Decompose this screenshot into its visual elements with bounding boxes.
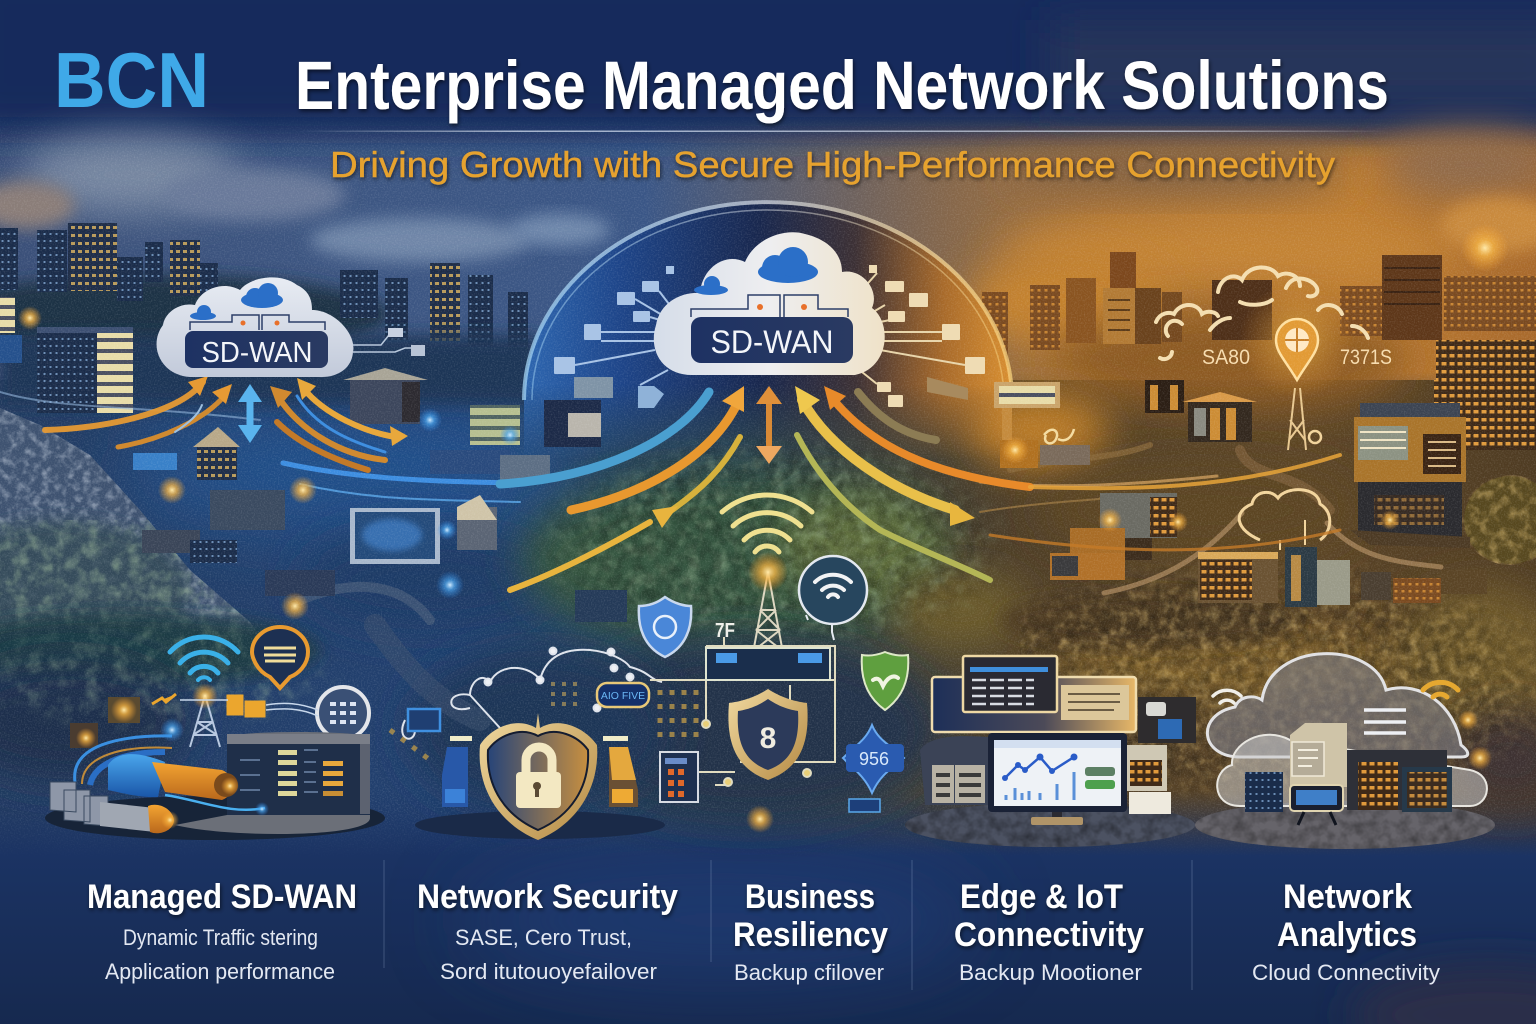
text block: Managed SD-WAN: Managed SD-WAN	[87, 878, 357, 916]
icon: green shield	[862, 652, 908, 710]
left skyline	[0, 223, 540, 413]
panel: edge and IoT illustration	[900, 656, 1200, 850]
text block: Edge and IoT Connectivity	[954, 878, 1144, 985]
status tag: AIO FIVE	[601, 690, 645, 702]
right cloud icons and location pin	[1156, 267, 1392, 450]
status readouts	[715, 620, 822, 663]
text block: Business Resiliency: Backup cfilover	[734, 960, 884, 985]
icon: wifi circle	[799, 556, 867, 640]
panel: managed SD-WAN illustration	[45, 627, 385, 840]
text block: Network Analytics: Analytics	[1277, 916, 1417, 954]
arrows to central cloud	[500, 386, 1340, 590]
icon: gold resiliency shield	[728, 689, 808, 780]
monitor with analytics chart	[988, 733, 1127, 825]
small buildings right	[994, 380, 1487, 607]
circuit lines and status box	[650, 637, 835, 786]
small buildings left	[133, 368, 627, 622]
icon: grid circle	[317, 687, 369, 739]
right skyline	[982, 224, 1536, 450]
status readouts: 7F	[715, 620, 735, 642]
right road curves	[980, 445, 1441, 593]
text block: Network Analytics: Cloud Connectivity	[1252, 960, 1440, 985]
text block: Network Security: SASE, Cero Trust,	[455, 925, 632, 950]
left SD-WAN cloud: SD-WAN	[202, 337, 312, 369]
text block: Edge and IoT Connectivity: Connectivity	[954, 916, 1144, 954]
document tower	[1290, 723, 1347, 787]
central SD-WAN cloud: SD-WAN	[710, 324, 834, 360]
text block: Edge and IoT Connectivity: Backup Mootioner	[959, 960, 1142, 985]
text block: Network Security	[417, 878, 678, 984]
icon: chat bubble	[252, 627, 308, 688]
text block: Managed SD-WAN	[87, 878, 357, 984]
text block: Business Resiliency	[733, 878, 888, 985]
server buildings	[1245, 750, 1452, 825]
icon: blue shield	[639, 597, 691, 657]
panel: network analytics illustration	[1190, 654, 1500, 850]
fine grain overlay	[0, 110, 1536, 860]
icon: padlock shield	[480, 713, 597, 840]
text block: Network Security: Sord itutouoyefailover	[440, 959, 657, 984]
panel: network security illustration	[390, 648, 696, 840]
large orange building	[1350, 403, 1470, 548]
signal glows and orange chain	[70, 694, 318, 748]
server rack	[175, 732, 370, 834]
icon: gold resiliency shield: 8	[760, 722, 776, 755]
front cloud	[1217, 735, 1487, 806]
list card	[1364, 710, 1406, 733]
icon: small clouds	[694, 247, 818, 295]
panel: business resiliency illustration	[639, 495, 908, 833]
left SD-WAN cloud	[157, 277, 425, 377]
side devices	[408, 709, 638, 807]
corner signal icons	[1213, 682, 1458, 703]
right hillside	[1000, 470, 1536, 820]
network road arcs left	[0, 392, 520, 720]
arrows to left cloud	[45, 376, 408, 470]
network cloud outline	[402, 648, 662, 739]
text block: Network Analytics	[1252, 878, 1440, 985]
central SD-WAN cloud	[654, 232, 885, 375]
back dashboard frame	[932, 656, 1196, 743]
text block: Edge and IoT Connectivity: Edge & IoT	[960, 878, 1123, 916]
central dome	[524, 200, 1012, 460]
back cloud outline	[1207, 654, 1468, 757]
central foliage	[410, 420, 1030, 820]
icon: tower	[190, 683, 220, 747]
icon: 956 badge	[843, 725, 904, 812]
icon: wifi signal	[170, 637, 238, 680]
central cloud connector lines	[554, 265, 985, 408]
icon: radio tower	[748, 552, 788, 680]
dark server equipment	[920, 736, 1171, 814]
icon: calculator	[660, 752, 698, 802]
right cloud icons and location pin: SA80	[1202, 346, 1250, 369]
right cloud icons and location pin: 7371S	[1340, 346, 1392, 369]
text block: Network Security: Network Security	[417, 878, 678, 916]
fiber cables	[50, 718, 269, 833]
icon: small clouds	[190, 283, 283, 320]
text block: Managed SD-WAN: Dynamic Traffic stering	[123, 925, 318, 950]
subtitle: Driving Growth with Secure High-Performance Connectivity	[330, 144, 1335, 185]
text block: Business Resiliency: Business	[745, 878, 875, 916]
left mountain and foliage	[0, 400, 360, 780]
text block: Business Resiliency: Resiliency	[733, 916, 888, 954]
logo: BCN: BCN	[54, 36, 209, 124]
icon: large wifi	[722, 495, 812, 552]
cloud outline	[1239, 490, 1330, 540]
text block: Managed SD-WAN: Application performance	[105, 959, 335, 984]
text block: Network Analytics: Network	[1283, 878, 1412, 916]
status tag	[597, 683, 649, 707]
icon: 956 badge: 956	[859, 749, 889, 769]
